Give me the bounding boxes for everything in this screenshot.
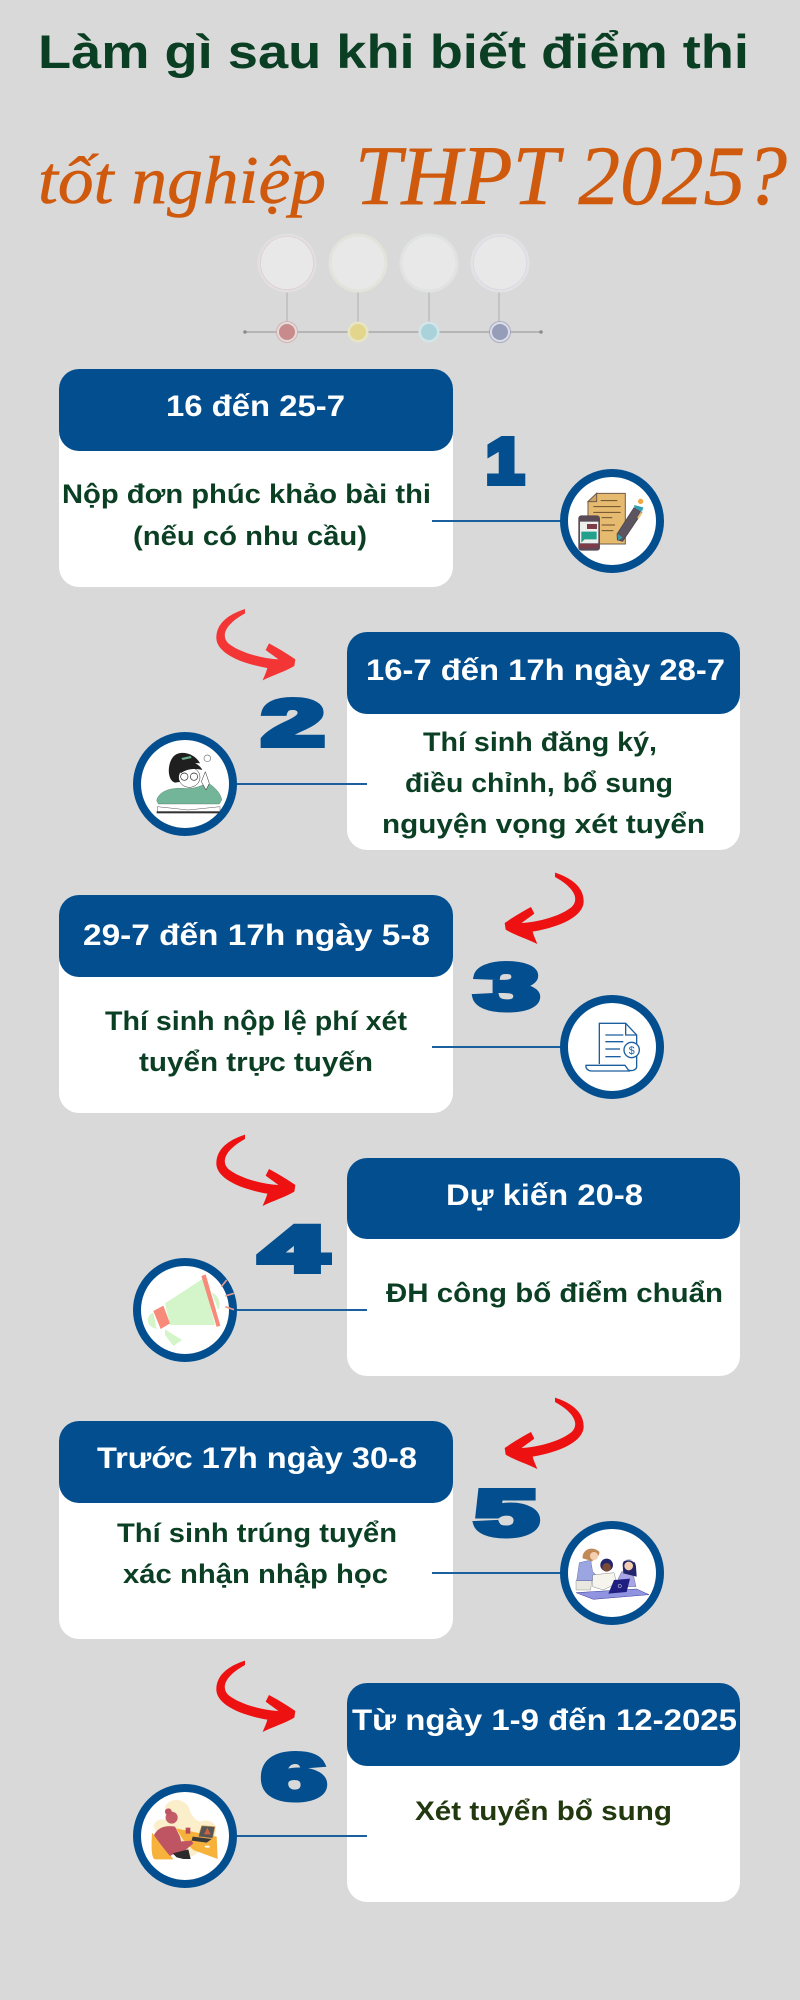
connector line [432,1046,565,1048]
date text: Dự kiến 20-8 [446,1179,643,1212]
step number: 3 [475,951,539,1023]
icon: person at laptop [137,1788,233,1884]
date header [347,632,740,714]
date header [59,1421,453,1503]
card body [59,895,453,1113]
card body [59,1421,453,1639]
date header [59,895,453,977]
description: Thí sinh đăng ký, [423,727,657,757]
date text: 29-7 đến 17h ngày 5-8 [83,919,430,952]
date text: 16-7 đến 17h ngày 28-7 [366,654,725,687]
panel: step 5 [59,1421,660,1639]
step number: 2 [262,687,324,759]
description: nguyện vọng xét tuyển [382,809,705,839]
date text: Trước 17h ngày 30-8 [97,1442,417,1475]
connector line [232,783,367,785]
description [117,1518,397,1589]
title line 2: tốt nghiệp [38,142,326,218]
card body [59,369,453,587]
title line 2: THPT 2025? [355,129,787,223]
date text: 16 đến 25-7 [166,390,345,423]
description: xác nhận nhập học [123,1559,388,1589]
icon: megaphone [137,1262,234,1358]
description [105,1006,407,1077]
title [38,25,787,223]
panel: step 1 [59,369,660,587]
arrow: step 3 to 4 [216,1135,295,1206]
panel: step 3 [59,895,660,1113]
connector line [237,1309,367,1311]
description [62,479,431,551]
card body [347,1683,740,1902]
icon: document, phone and pen [564,473,660,569]
date header [59,369,453,451]
icon: fee receipt [564,999,660,1095]
icon: fee receipt: $ [629,1045,635,1057]
connector line [432,1572,565,1574]
arrow: step 4 to 5 [505,1398,584,1469]
date header [347,1683,740,1766]
card body [347,632,740,850]
connector line [232,1835,367,1837]
description: Thí sinh trúng tuyển [117,1518,397,1548]
panel: step 2 [137,632,740,850]
date text: Từ ngày 1-9 đến 12-2025 [352,1704,737,1737]
icon: student with book [137,736,233,832]
description: Nộp đơn phúc khảo bài thi [62,479,431,509]
description: ĐH công bố điểm chuẩn [386,1278,723,1308]
description: Thí sinh nộp lệ phí xét [105,1006,407,1036]
panel: step 4 [137,1158,740,1376]
panel: step 6 [137,1683,740,1902]
description: điều chỉnh, bổ sung [405,768,673,798]
title line 2 [38,129,787,223]
step number: 4 [260,1213,328,1285]
step number: 6 [262,1741,326,1813]
arrow: step 5 to 6 [216,1661,295,1732]
icon: students with laptop [564,1525,660,1621]
description: tuyển trực tuyến [139,1047,373,1077]
arrow: step 2 to 3 [505,873,584,944]
arrow: step 1 to 2 [216,609,295,680]
decorative timeline graphic [243,234,543,342]
description [382,727,705,839]
description: Xét tuyển bổ sung [415,1796,672,1826]
card body [347,1158,740,1376]
connector line [432,520,565,522]
step number: 1 [486,425,524,497]
description: (nếu có nhu cầu) [133,521,367,551]
date header [347,1158,740,1239]
step number: 5 [475,1477,538,1549]
title line 1: Làm gì sau khi biết điểm thi [38,25,749,78]
